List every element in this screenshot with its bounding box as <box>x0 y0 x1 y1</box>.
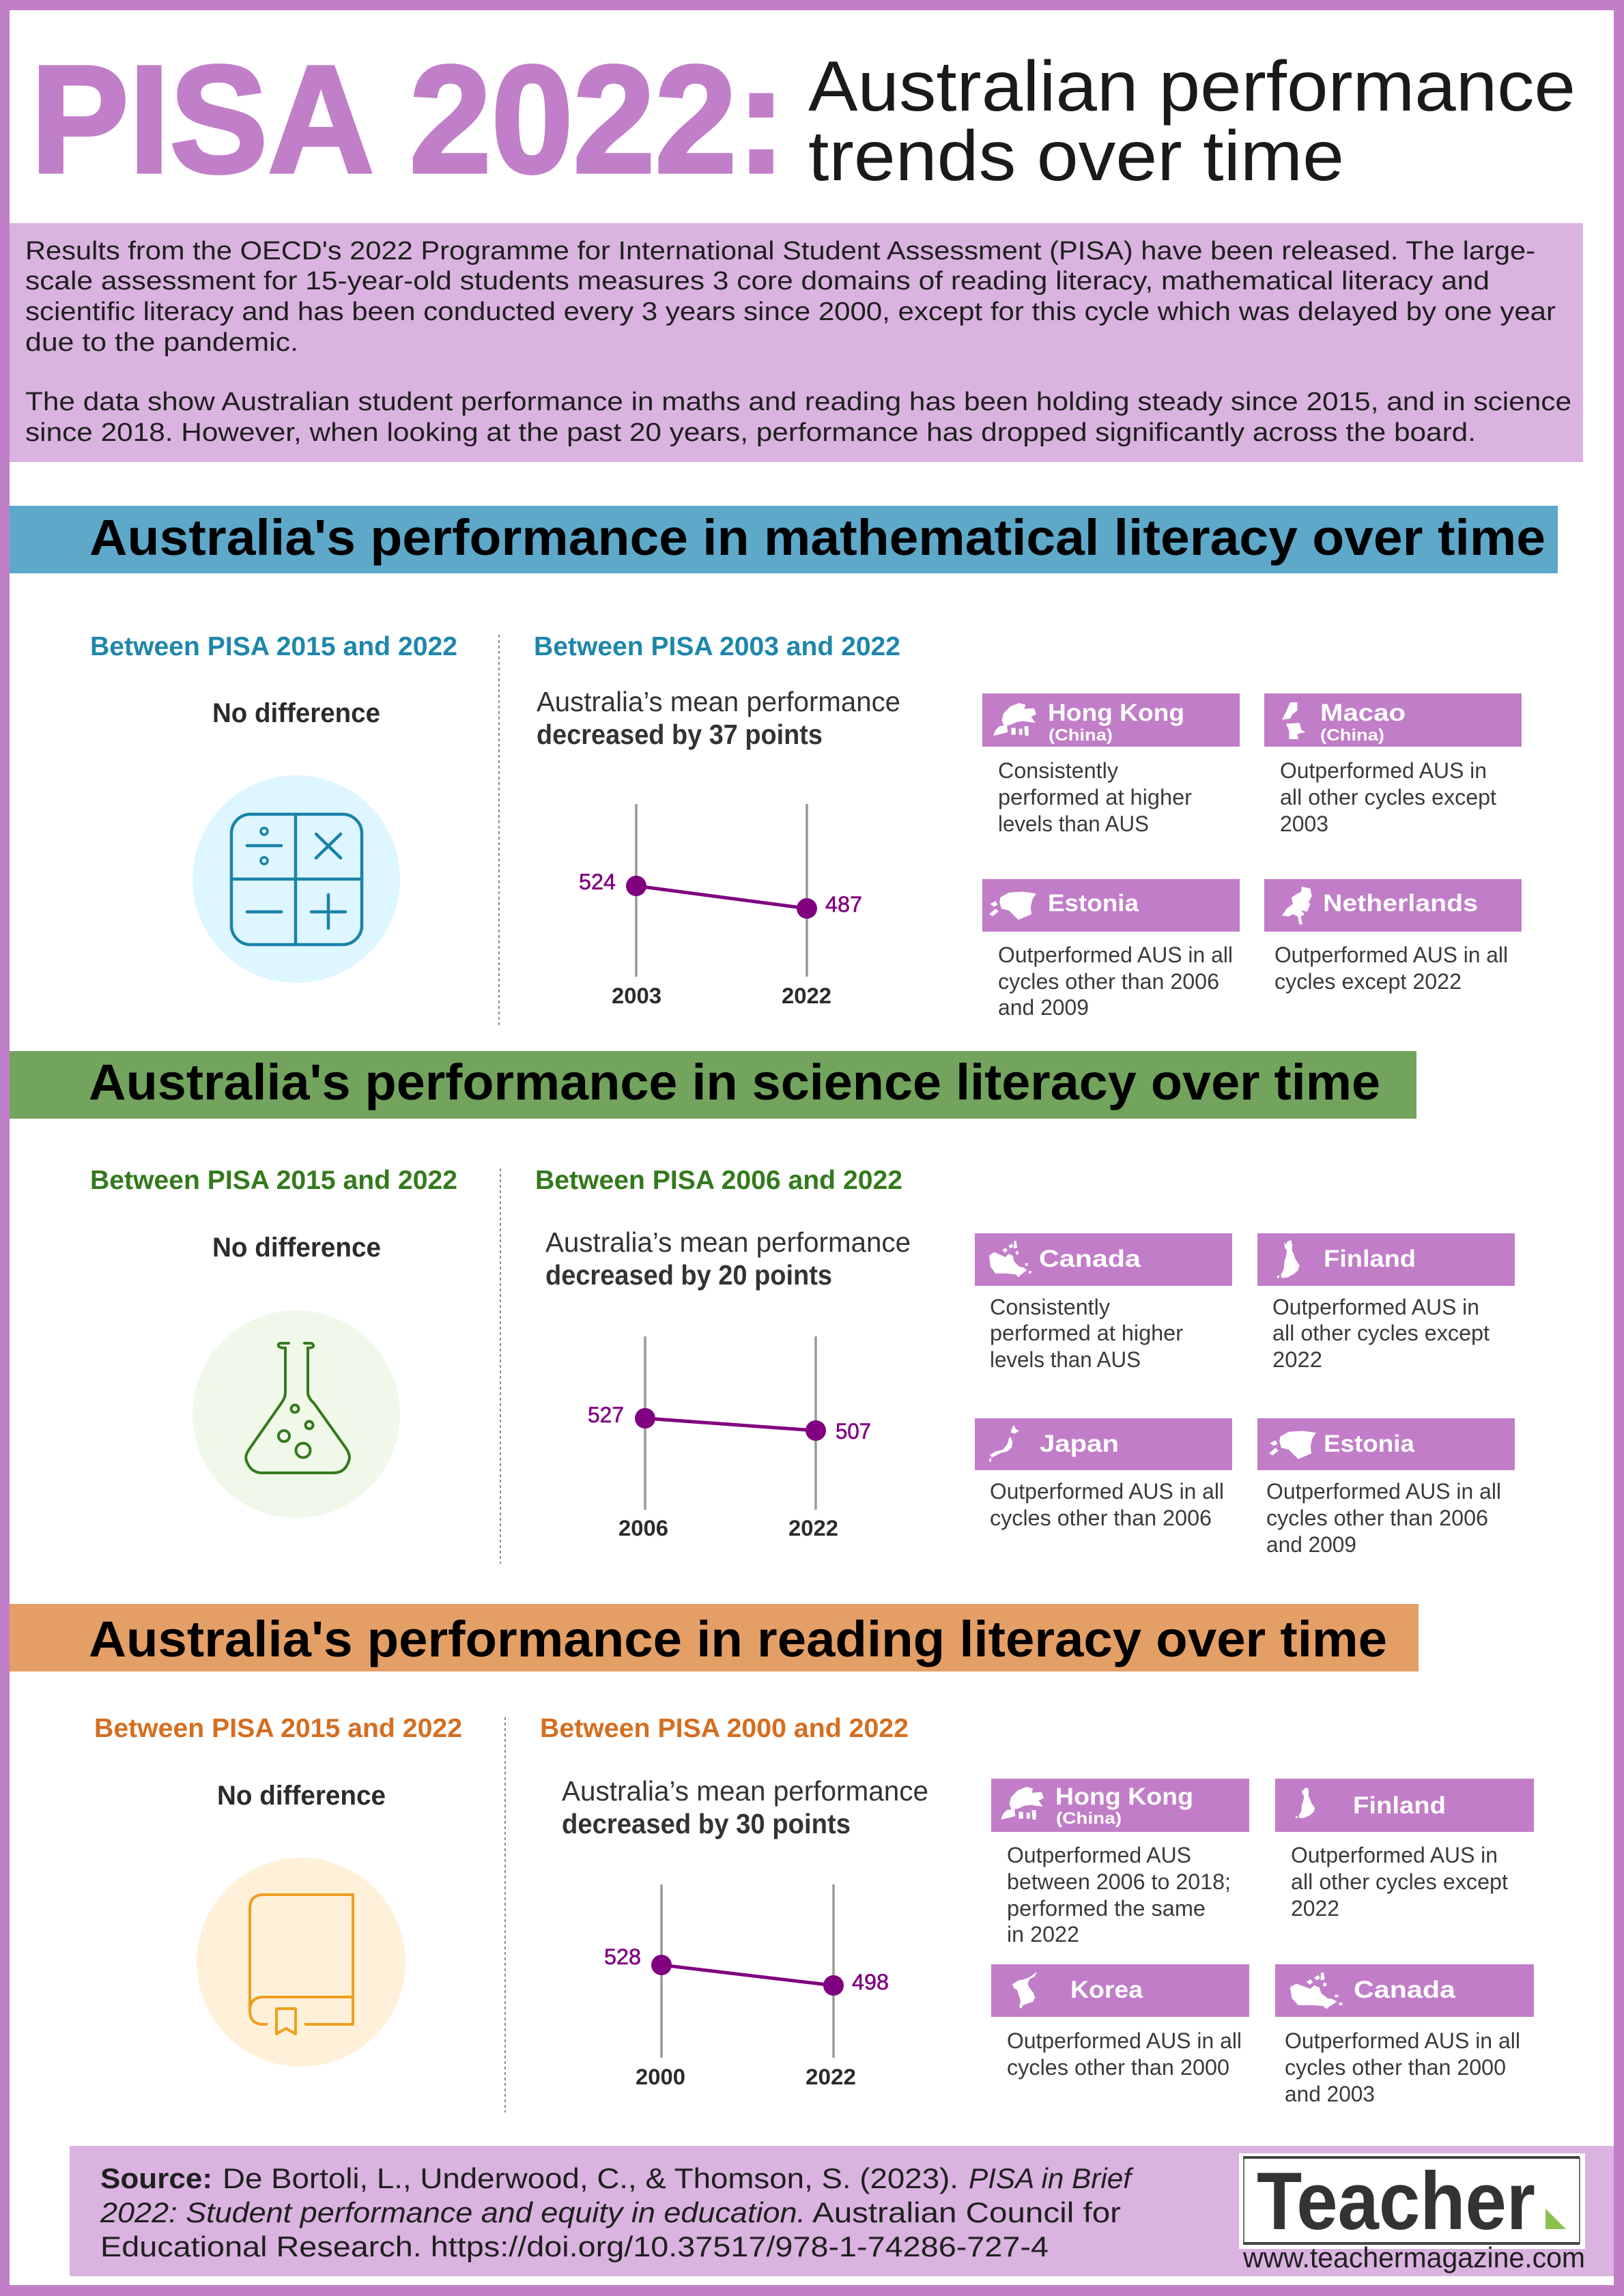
text: reading mean performance: decreased by 30 points <box>562 1808 851 1839</box>
chart: maths slope: 2022 <box>782 984 831 1008</box>
text: source citation <box>100 2162 1134 2263</box>
card: Hong Kong (reading): (China) <box>1056 1809 1122 1828</box>
heading: science 2015 to 2022: Between PISA 2015 and 2022 <box>90 1166 457 1195</box>
icon: Japan map <box>989 1425 1019 1462</box>
card: Canada (reading): Canada <box>1354 1977 1456 2003</box>
card: Japan (science) <box>975 1418 1232 1530</box>
card: Korea (reading): Outperformed AUS in all <box>1007 2028 1242 2053</box>
panel: introduction: due to the pandemic. <box>25 328 298 357</box>
card: Hong Kong (maths): Hong Kong <box>1048 700 1184 726</box>
title: Australian performance <box>808 47 1576 126</box>
panel: introduction: since 2018. However, when looking at the past 20 years, performance has dropped significantly across the board. <box>25 418 1476 447</box>
card: Estonia (maths): Estonia <box>1048 890 1139 917</box>
chart: reading slope: 2022 <box>806 2065 856 2089</box>
card: Hong Kong (maths): Consistently <box>998 758 1118 783</box>
card: Hong Kong (maths): performed at higher <box>998 785 1192 809</box>
card: Netherlands (maths): Netherlands <box>1323 890 1478 917</box>
card: Macao (maths): Outperformed AUS in <box>1280 758 1487 783</box>
icon: book <box>197 1858 405 2067</box>
card: Estonia (science): Estonia <box>1324 1431 1415 1457</box>
panel: introduction <box>10 223 1583 462</box>
card: Canada (reading) <box>1275 1964 1534 2106</box>
text: source citation: De Bortoli, L., Underwood, C., & Thomson, S. (2023). <box>223 2162 958 2194</box>
card: Finland (reading): 2022 <box>1291 1896 1339 1921</box>
heading: maths 2003 to 2022: Between PISA 2003 and 2022 <box>534 632 900 661</box>
card: Hong Kong (reading): Hong Kong <box>1055 1783 1193 1810</box>
icon: Canada map <box>989 1241 1031 1278</box>
chart: science slope: 507 <box>836 1419 871 1444</box>
card: Estonia (science): Outperformed AUS in all <box>1266 1479 1501 1504</box>
panel: reading literacy <box>10 1604 1534 2112</box>
card: Canada (science) <box>975 1233 1232 1372</box>
card: Hong Kong (reading): performed the same <box>1007 1896 1206 1921</box>
text: source citation: PISA in Brief <box>969 2162 1134 2194</box>
card: Hong Kong (reading): Outperformed AUS <box>1007 1843 1191 1867</box>
card: Estonia (maths): Outperformed AUS in all <box>998 943 1233 967</box>
card: Finland (science) <box>1257 1233 1515 1372</box>
chart: reading slope <box>604 1884 889 2089</box>
icon: Estonia map <box>989 891 1036 920</box>
icon: Finland map <box>1277 1240 1300 1278</box>
card: Korea (reading) <box>991 1964 1249 2080</box>
chart: maths slope: 2003 <box>612 984 661 1008</box>
icon: Hong Kong map <box>993 703 1036 736</box>
card: Macao (maths): 2003 <box>1280 812 1328 836</box>
card: Canada (reading): cycles other than 2000 <box>1285 2055 1506 2080</box>
icon: Canada map <box>1290 1972 1342 2009</box>
card: Korea (reading): cycles other than 2000 <box>1007 2055 1229 2080</box>
card: Macao (maths): (China) <box>1320 726 1384 745</box>
icon: Macao map <box>1282 702 1305 739</box>
card: Finland (reading): Outperformed AUS in <box>1291 1843 1498 1867</box>
text: maths mean performance <box>537 686 900 750</box>
card: Finland (reading) <box>1275 1779 1534 1921</box>
card: Finland (science): Finland <box>1324 1246 1416 1272</box>
card: Netherlands (maths) <box>1264 879 1522 994</box>
card: Hong Kong (maths): (China) <box>1049 726 1113 745</box>
heading: science 2006 to 2022: Between PISA 2006 and 2022 <box>535 1166 902 1195</box>
card: Netherlands (maths): Outperformed AUS in all <box>1274 943 1508 967</box>
text: reading no difference: No difference <box>217 1781 386 1811</box>
title: trends over time <box>808 117 1344 196</box>
text: source citation: 2022: Student performance and equity in education. <box>100 2196 806 2228</box>
text: website: www.teachermagazine.com <box>1242 2241 1585 2273</box>
card: Finland (reading): Finland <box>1353 1792 1446 1819</box>
card: Finland (science): all other cycles except <box>1272 1321 1490 1345</box>
card: Finland (science): Outperformed AUS in <box>1272 1295 1479 1319</box>
card: Hong Kong (reading) <box>991 1779 1249 1947</box>
panel: introduction: scientific literacy and has been conducted every 3 years since 2000, except for this cycle which was delayed by one year <box>25 298 1556 326</box>
card: Hong Kong (maths): levels than AUS <box>998 812 1149 836</box>
card: Canada (science): Canada <box>1039 1246 1141 1272</box>
card: Finland (science): 2022 <box>1272 1347 1322 1372</box>
card: Korea (reading): Korea <box>1070 1977 1143 2003</box>
icon: Estonia map <box>1269 1431 1316 1459</box>
card: Estonia (maths): cycles other than 2006 <box>998 969 1219 994</box>
panel: introduction: scale assessment for 15-year-old students measures 3 core domains of reading literacy, mathematical literacy and <box>25 267 1490 296</box>
card: Canada (reading): Outperformed AUS in all <box>1285 2028 1520 2053</box>
card: Estonia (maths): and 2009 <box>998 995 1089 1020</box>
title <box>31 34 1576 205</box>
card: Estonia (science): and 2009 <box>1266 1532 1356 1557</box>
card: Canada (science): levels than AUS <box>990 1347 1141 1372</box>
card: Macao (maths) <box>1264 693 1522 836</box>
panel: source footer <box>70 2146 1614 2276</box>
chart: science slope: 2006 <box>618 1516 668 1540</box>
chart: maths slope: 524 <box>579 870 616 894</box>
text: science mean performance <box>545 1226 911 1291</box>
text: source citation: Australian Council for <box>812 2196 1121 2228</box>
icon: flask <box>193 1310 400 1518</box>
card: Canada (science): performed at higher <box>990 1321 1183 1345</box>
chart: maths slope: 487 <box>825 892 862 917</box>
chart: science slope <box>588 1336 871 1540</box>
card: Netherlands (maths): cycles except 2022 <box>1274 969 1462 994</box>
section heading: science: Australia's performance in science literacy over time <box>89 1054 1380 1110</box>
card: Finland (reading): all other cycles except <box>1291 1869 1508 1894</box>
text: science no difference: No difference <box>212 1233 381 1263</box>
text: maths no difference: No difference <box>212 698 380 728</box>
icon: Korea map <box>1012 1972 1037 2009</box>
logo: Teacher: Teacher <box>1257 2155 1535 2247</box>
section heading: reading: Australia's performance in reading literacy over time <box>89 1611 1387 1667</box>
text: reading mean performance: Australia’s mean performance <box>562 1775 928 1807</box>
card: Estonia (science) <box>1257 1418 1515 1557</box>
card: Hong Kong (reading): between 2006 to 2018; <box>1007 1869 1231 1894</box>
chart: reading slope: 528 <box>604 1945 641 1969</box>
chart: science slope: 2022 <box>788 1516 838 1540</box>
panel: introduction: Results from the OECD's 2022 Programme for International Student Assessment (PISA) have been released. The large- <box>25 237 1535 266</box>
heading: reading 2015 to 2022: Between PISA 2015 and 2022 <box>94 1714 462 1743</box>
icon: Netherlands map <box>1282 887 1312 924</box>
text: reading mean performance <box>562 1775 928 1839</box>
icon: Finland map <box>1296 1788 1315 1818</box>
chart: reading slope: 2000 <box>636 2065 685 2089</box>
card: Japan (science): cycles other than 2006 <box>990 1506 1212 1530</box>
text: science mean performance: Australia’s mean performance <box>545 1226 911 1258</box>
card: Hong Kong (reading): in 2022 <box>1007 1922 1079 1947</box>
title: PISA 2022: <box>31 34 786 205</box>
icon: calculator <box>193 775 400 983</box>
card: Hong Kong (maths) <box>982 693 1240 836</box>
card: Macao (maths): all other cycles except <box>1280 785 1496 809</box>
heading: maths 2015 to 2022: Between PISA 2015 and 2022 <box>90 632 457 661</box>
card: Canada (reading): and 2003 <box>1285 2082 1375 2106</box>
panel: mathematical literacy <box>10 506 1558 1027</box>
text: source citation: Source: <box>100 2162 212 2194</box>
text: science mean performance: decreased by 20 points <box>545 1259 832 1291</box>
card: Estonia (maths) <box>982 879 1240 1020</box>
chart: maths slope <box>579 804 862 1008</box>
icon: Hong Kong map <box>1001 1787 1044 1820</box>
chart: science slope: 527 <box>588 1403 624 1427</box>
card: Macao (maths): Macao <box>1320 700 1406 726</box>
card: Japan (science): Outperformed AUS in all <box>990 1479 1224 1504</box>
heading: reading 2000 to 2022: Between PISA 2000 and 2022 <box>540 1714 909 1743</box>
text: maths mean performance: decreased by 37 points <box>537 719 823 750</box>
card: Canada (science): Consistently <box>990 1295 1110 1319</box>
chart: reading slope: 498 <box>852 1970 889 1994</box>
panel: science literacy <box>10 1051 1515 1564</box>
text: source citation: Educational Research. https://doi.org/10.37517/978-1-74286-727-4 <box>100 2230 1049 2263</box>
card: Japan (science): Japan <box>1040 1431 1119 1457</box>
text: maths mean performance: Australia’s mean performance <box>537 686 900 717</box>
section heading: maths: Australia's performance in mathematical literacy over time <box>89 509 1545 566</box>
card: Estonia (science): cycles other than 2006 <box>1266 1506 1488 1530</box>
panel: introduction: The data show Australian student performance in maths and reading has been holding steady since 2015, and in science <box>25 388 1571 416</box>
